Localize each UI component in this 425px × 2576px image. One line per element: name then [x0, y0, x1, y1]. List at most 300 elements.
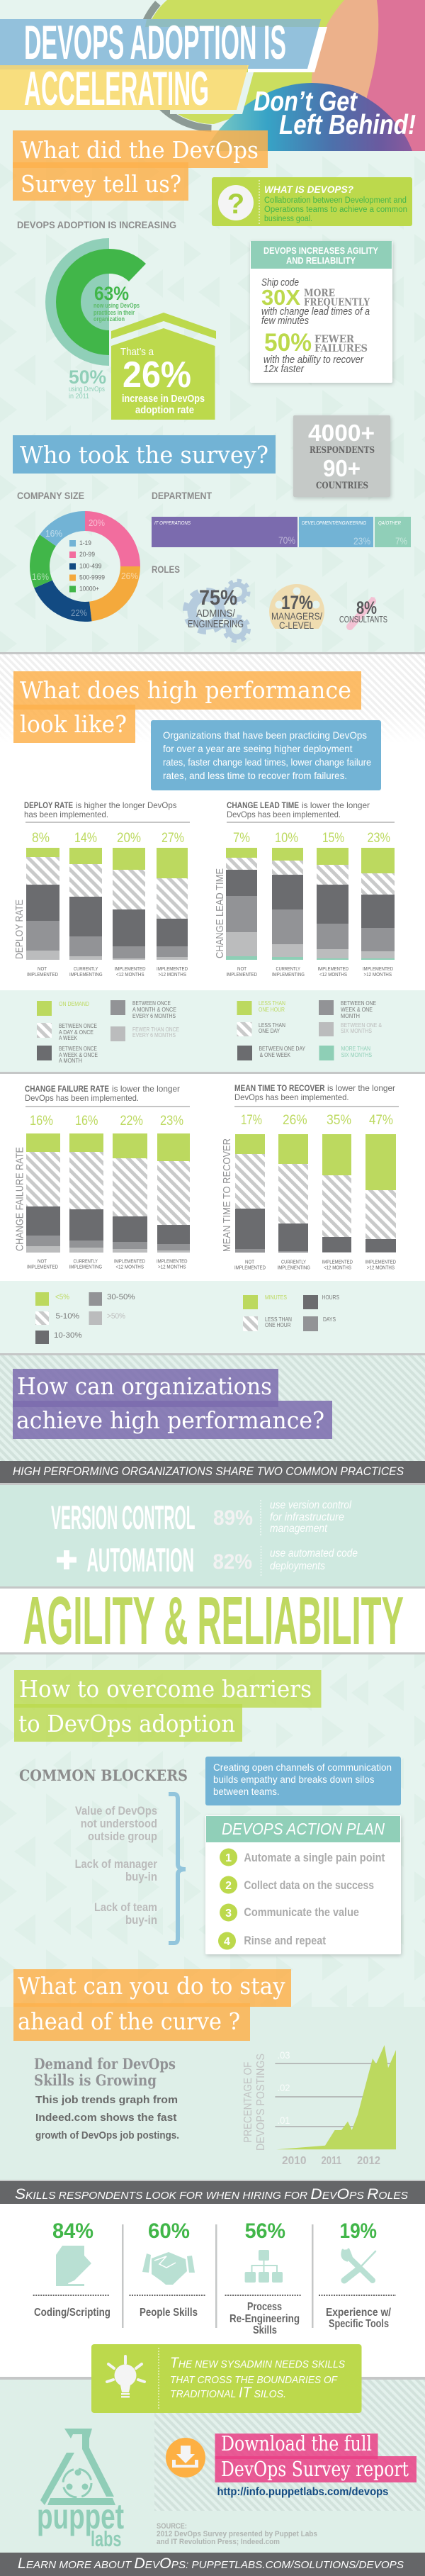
panel: devops action plan: DEVOPS ACTION PLAN	[222, 1820, 385, 1838]
subheading: roles: ROLES	[152, 564, 180, 575]
chart: change failure rate: >12 MONTHS	[158, 1263, 186, 1270]
panel: respondents and countries	[293, 415, 390, 497]
legend band: deploy rate and lead time: SIX MONTHS	[341, 1028, 372, 1034]
callout: open channels of communication: between teams.	[213, 1786, 280, 1797]
callout: what is devops: business goal.	[264, 215, 312, 223]
heading: what can you do to stay ahead	[13, 1969, 291, 2041]
chart: change failure rate: CHANGE FAILURE RATE	[14, 1147, 26, 1251]
heading: what did the survey tell us: What did the DevOps	[21, 136, 259, 164]
bar: department split: 23%	[353, 535, 370, 547]
area chart: devops job postings	[242, 2045, 396, 2167]
chart: mean time to recover: MEAN TIME TO RECOVER	[221, 1138, 233, 1252]
panel: agility and reliability: few minutes	[261, 315, 309, 327]
legend band: failure rate and recovery: ONE HOUR	[265, 1322, 291, 1328]
chart: deploy rate: 14%	[74, 831, 97, 846]
skill: coding and scripting: Coding/Scripting	[34, 2307, 110, 2319]
chart: deploy rate: is higher the longer DevOps	[76, 800, 177, 810]
subheading: company size: COMPANY SIZE	[17, 490, 84, 501]
panel: version control and automation: AUTOMATION	[86, 1541, 194, 1579]
panel: devops action plan: Automate a single pain point	[244, 1851, 385, 1864]
house callout: 26% increase: That’s a	[120, 346, 154, 358]
legend band: deploy rate and lead time: BETWEEN ONE	[341, 1000, 376, 1007]
legend band: failure rate and recovery: DAYS	[323, 1316, 336, 1323]
title banner	[0, 16, 327, 116]
legend band: deploy rate and lead time: LESS THAN	[259, 1000, 285, 1007]
chart: mean time to recover: IMPLEMENTED	[366, 1259, 396, 1265]
callout: the new sysadmin: TRADITIONAL IT SILOS.	[170, 2385, 286, 2401]
chart: mean time to recover: 35%	[327, 1113, 351, 1128]
bar: department split: 70%	[278, 534, 295, 546]
donut chart: adoption: 63%	[94, 283, 129, 304]
callout: the new sysadmin: THE NEW SYSADMIN NEEDS SKILLS	[170, 2355, 345, 2371]
panel: respondents and countries: RESPONDENTS	[310, 445, 375, 456]
legend band: deploy rate and lead time: EVERY 6 MONTHS	[132, 1013, 176, 1019]
panel: common blockers: COMMON BLOCKERS	[19, 1766, 188, 1784]
skill: process re-engineering: Re-Engineering	[230, 2313, 300, 2325]
panel: agility and reliability: 50%	[264, 329, 312, 357]
chart: change lead time: 15%	[322, 831, 344, 846]
donut chart: adoption: 50%	[69, 366, 106, 388]
donut chart: company size: 16%	[45, 528, 62, 539]
panel: devops action plan: Collect data on the success	[244, 1878, 374, 1892]
heading: what can you do to stay ahead: What can you do to stay	[18, 1972, 285, 2000]
chart: change failure rate: 22%	[120, 1114, 143, 1129]
legend band: deploy rate and lead time: WEEK & ONE	[341, 1007, 373, 1013]
legend band: deploy rate and lead time: ONE DAY	[259, 1028, 280, 1034]
panel: agility and reliability: with the ability to recover	[264, 354, 364, 366]
chart: change lead time: IMPLEMENTING	[272, 971, 305, 978]
legend band: deploy rate and lead time: BETWEEN ONE DAY	[259, 1046, 306, 1052]
panel: agility and reliability: with change lead times of a	[261, 306, 370, 318]
text block: demand for devops skills: Indeed.com shows the fast	[35, 2112, 177, 2124]
panel: agility and reliability: Ship code	[261, 276, 299, 289]
callout: organizations practicing devops	[151, 720, 381, 790]
chart: mean time to recover: IMPLEMENTED	[322, 1259, 353, 1265]
panel: agility and reliability	[250, 241, 392, 383]
panel: version control and automation: use version control	[270, 1499, 351, 1511]
logo: puppet labs: puppet	[37, 2497, 124, 2536]
background: striped section	[0, 1355, 425, 1461]
panel: devops action plan	[205, 1815, 401, 1954]
area chart: devops job postings: PRECENTAGE OF	[242, 2062, 254, 2143]
area chart: devops job postings: 2010	[282, 2155, 307, 2167]
text block: demand for devops skills: growth of DevOps job postings.	[35, 2129, 179, 2141]
chart: change lead time	[214, 800, 395, 978]
chart: change failure rate: IMPLEMENTING	[69, 1263, 102, 1270]
legend band: deploy rate and lead time: ONE HOUR	[259, 1007, 285, 1013]
legend band: deploy rate and lead time: BETWEEN ONCE	[59, 1023, 97, 1029]
icon: question mark: ?	[227, 189, 244, 220]
legend band: deploy rate and lead time: LESS THAN	[259, 1022, 285, 1029]
tagline: Don’t Get	[254, 86, 358, 117]
chart: mean time to recover: >12 MONTHS	[367, 1264, 395, 1270]
icon: org chart	[245, 2250, 283, 2283]
legend band: deploy rate and lead time: A MONTH & ONCE	[132, 1007, 176, 1013]
role: consultants	[339, 597, 387, 627]
chart: change lead time: DevOps has been implemented.	[227, 810, 341, 819]
panel: devops action plan: 4	[224, 1936, 230, 1948]
callout: open channels of communication	[205, 1757, 401, 1805]
chart: change lead time: <12 MONTHS	[319, 971, 347, 978]
panel: agility and reliability: 12x faster	[264, 363, 305, 375]
chart: change failure rate: is lower the longer	[112, 1084, 180, 1094]
chart: change lead time: IMPLEMENTED	[363, 965, 393, 972]
panel: respondents and countries: 90+	[323, 455, 361, 481]
area chart: devops job postings: 2012	[357, 2155, 380, 2167]
skill: experience with tools	[319, 2219, 396, 2330]
footer banner: learn more: LEARN MORE ABOUT DEVOPS: PUPPETLABS.COM/SOLUTIONS/DEVOPS	[18, 2555, 404, 2572]
donut chart: company size: 22%	[71, 607, 87, 618]
icon: document and pen	[56, 2246, 91, 2286]
house callout: 26% increase: increase in DevOps	[122, 393, 205, 405]
panel: devops action plan: Communicate the value	[244, 1905, 359, 1919]
chart: deploy rate: >12 MONTHS	[159, 971, 186, 978]
callout: organizations practicing devops: rates, faster change lead times, lower change failure	[163, 756, 371, 768]
role: admins and engineering	[186, 581, 249, 641]
callout: the new sysadmin	[91, 2344, 361, 2413]
panel: version control and automation: management	[270, 1523, 327, 1535]
legend band: failure rate and recovery: 5-10%	[55, 1312, 79, 1321]
chart: change failure rate: IMPLEMENTED	[114, 1258, 145, 1265]
panel: common blockers: Value of DevOps	[75, 1804, 157, 1818]
donut chart: adoption: now using DevOps	[94, 302, 140, 309]
heading: how to overcome barriers	[14, 1670, 322, 1742]
panel: agility and reliability: 30X	[261, 285, 300, 310]
panel: version control and automation: for infrastructure	[270, 1511, 344, 1523]
house callout: 26% increase: 26%	[123, 354, 191, 396]
icon: crossed tools	[342, 2249, 375, 2280]
donut chart: company size: 20%	[89, 517, 105, 528]
panel: agility and reliability: FAILURES	[314, 343, 368, 354]
skill: process re-engineering: Process	[247, 2301, 282, 2313]
chart: change failure rate: NOT	[38, 1258, 47, 1265]
legend band: deploy rate and lead time: BETWEEN ONCE	[132, 1000, 171, 1007]
chart: change failure rate: IMPLEMENTED	[157, 1258, 188, 1265]
chart: change lead time: CHANGE LEAD TIME	[214, 868, 226, 958]
background: white performance section	[0, 654, 425, 990]
chart: change lead time: IMPLEMENTED	[317, 965, 348, 972]
chart: change failure rate: 16%	[75, 1114, 98, 1129]
panel: version control and automation: use automated code	[270, 1547, 358, 1559]
source note: SOURCE:	[157, 2522, 187, 2531]
house callout: 26% increase	[111, 313, 216, 420]
skill: people skills: 60%	[148, 2219, 190, 2243]
panel: common blockers: buy-in	[125, 1870, 157, 1883]
chart: change lead time: 10%	[275, 831, 298, 846]
role: managers and c-level: MANAGERS/	[271, 610, 322, 622]
role: managers and c-level: C-LEVEL	[279, 620, 314, 631]
bar: department split: DEVELOPMENT/ENGINEERING	[302, 520, 366, 526]
callout: organizations practicing devops: rates, and less time to recover from failures.	[163, 770, 347, 781]
panel: devops action plan: 1	[225, 1852, 232, 1864]
chart: change lead time: >12 MONTHS	[364, 971, 392, 978]
area chart: devops job postings: DEVOPS POSTINGS	[255, 2054, 267, 2151]
call to action: download the report: http://info.puppetlabs.com/devops	[217, 2486, 388, 2498]
legend: company size	[69, 539, 105, 593]
chart: mean time to recover: 17%	[241, 1113, 262, 1128]
banner: skills respondents look for: SKILLS RESPONDENTS LOOK FOR WHEN HIRING FOR DEVOPS ROLES	[15, 2186, 408, 2202]
text block: demand for devops skills: Demand for DevOps	[34, 2055, 176, 2073]
legend: company size: 100-499	[79, 563, 102, 570]
logo: puppet labs: labs	[91, 2526, 122, 2551]
chart: change lead time: IMPLEMENTED	[227, 971, 257, 978]
legend band: failure rate and recovery: 30-50%	[107, 1293, 135, 1301]
role: admins and engineering: ENGINEERING	[188, 618, 244, 630]
legend band: deploy rate and lead time: MORE THAN	[341, 1046, 370, 1052]
chart: mean time to recover: is lower the longer	[327, 1083, 395, 1093]
panel: devops action plan: Rinse and repeat	[244, 1934, 326, 1947]
legend band: failure rate and recovery: LESS THAN	[265, 1316, 292, 1323]
call to action: download the report: Download the full	[221, 2431, 372, 2455]
legend: company size: 500-9999	[79, 574, 105, 581]
donut chart: adoption: using DevOps	[69, 386, 105, 393]
chart: mean time to recover: CURRENTLY	[281, 1259, 306, 1265]
callout: what is devops	[212, 177, 412, 226]
panel: devops action plan: 2	[225, 1880, 232, 1892]
banner: skills respondents look for	[0, 2180, 425, 2204]
panel: respondents and countries: 4000+	[308, 420, 375, 446]
skill: experience with tools: Specific Tools	[329, 2318, 389, 2330]
callout: open channels of communication: builds empathy and breaks down silos	[213, 1774, 375, 1785]
panel: version control and automation: deployments	[270, 1560, 325, 1572]
source note	[157, 2522, 317, 2546]
panel: skills	[0, 2204, 425, 2377]
legend band: failure rate and recovery: 10-30%	[54, 1331, 82, 1340]
chart: deploy rate: IMPLEMENTED	[115, 965, 146, 972]
chart: deploy rate: DEPLOY RATE	[24, 800, 73, 810]
chart: deploy rate: 8%	[32, 831, 50, 846]
chart: change failure rate: CURRENTLY	[74, 1258, 98, 1265]
heading: what does high performance look like: look like?	[20, 710, 127, 738]
legend band: deploy rate and lead time: ON DEMAND	[59, 1001, 89, 1007]
legend band: deploy rate and lead time: MONTH	[341, 1013, 360, 1019]
chart: mean time to recover: MEAN TIME TO RECOVER	[234, 1083, 325, 1093]
role: consultants: CONSULTANTS	[339, 614, 387, 625]
chart: deploy rate: IMPLEMENTED	[157, 965, 188, 972]
panel: common blockers: buy-in	[125, 1913, 157, 1927]
callout: organizations practicing devops: Organizations that have been practicing DevOps	[163, 729, 367, 741]
chart: change lead time: NOT	[237, 965, 246, 972]
chart: mean time to recover: 47%	[369, 1113, 393, 1128]
bar: department split: 7%	[395, 535, 407, 547]
skill: coding and scripting: 84%	[52, 2219, 94, 2243]
chart: mean time to recover: NOT	[245, 1259, 254, 1265]
icon: question mark	[218, 185, 254, 220]
skill: process re-engineering: 56%	[245, 2219, 285, 2243]
chart: change failure rate: DevOps has been implemented.	[25, 1093, 139, 1103]
role: managers and c-level	[269, 584, 324, 631]
call to action: download the report	[215, 2431, 416, 2498]
chart: mean time to recover: 26%	[283, 1113, 307, 1128]
panel: version control and automation: VERSION CONTROL	[51, 1499, 196, 1536]
role: admins and engineering: ADMINS/	[196, 607, 236, 620]
heading: what did the survey tell us	[13, 130, 268, 201]
panel: common blockers: outside group	[88, 1830, 157, 1843]
callout: open channels of communication: Creating open channels of communication	[213, 1762, 392, 1773]
text block: demand for devops skills	[34, 2055, 179, 2141]
chart: deploy rate: NOT	[38, 965, 47, 972]
chart: change failure rate: <12 MONTHS	[116, 1263, 144, 1270]
bar: department split: QA/OTHER	[378, 520, 401, 526]
donut chart: adoption: organization	[94, 315, 125, 323]
panel: devops action plan: 3	[225, 1908, 232, 1920]
chart: mean time to recover: IMPLEMENTING	[278, 1264, 310, 1270]
heading: what can you do to stay ahead: ahead of the curve ?	[18, 2007, 240, 2035]
legend: company size: 1-19	[79, 539, 91, 547]
callout: the new sysadmin: THAT CROSS THE BOUNDARIES OF	[170, 2374, 338, 2386]
legend band: deploy rate and lead time: BETWEEN ONCE	[59, 1046, 97, 1052]
legend band: deploy rate and lead time: FEWER THAN ONCE	[132, 1026, 179, 1033]
chart: change lead time: 7%	[233, 831, 250, 846]
chart: mean time to recover: DevOps has been implemented.	[234, 1092, 348, 1102]
icon: light bulb	[107, 2356, 144, 2397]
hero artwork: coloured circles	[139, 0, 425, 151]
donut chart: adoption	[45, 238, 146, 401]
chart: deploy rate: 27%	[162, 831, 184, 846]
heading: what did the survey tell us: Survey tell us?	[21, 170, 181, 198]
source note: 2012 DevOps Survey presented by Puppet Labs	[157, 2530, 317, 2538]
legend band: failure rate and recovery: >50%	[107, 1312, 125, 1321]
background: footer mint section	[0, 2377, 425, 2553]
donut chart: adoption: in 2011	[69, 393, 89, 401]
legend: company size: 10000+	[79, 586, 99, 593]
chart: change failure rate: IMPLEMENTED	[27, 1263, 58, 1270]
chart: change lead time: 23%	[367, 831, 390, 846]
chart: change failure rate: 23%	[160, 1114, 183, 1129]
heading: how can organizations achieve high performance: How can organizations	[17, 1372, 272, 1400]
legend band: deploy rate and lead time: BETWEEN ONE &	[341, 1022, 382, 1029]
heading: what does high performance look like	[13, 671, 361, 743]
heading: how to overcome barriers: How to overcome barriers	[19, 1675, 312, 1703]
callout: what is devops: Collaboration between Development and	[264, 196, 407, 205]
callout: organizations practicing devops: for over a year are seeing higher deployment	[163, 743, 353, 754]
panel: common blockers: Lack of manager	[75, 1857, 157, 1871]
callout: what is devops: Operations teams to achieve a common	[264, 206, 407, 214]
role: admins and engineering: 75%	[199, 586, 237, 610]
panel: version control and automation	[0, 1485, 425, 1589]
background: white lower chart section	[0, 1074, 425, 1281]
bar: department split	[152, 517, 411, 547]
legend band: failure rate and recovery: <5%	[55, 1293, 69, 1301]
panel: agility and reliability: FREQUENTLY	[304, 297, 370, 308]
icon: plus	[57, 1550, 76, 1569]
panel: common blockers: not understood	[81, 1817, 157, 1830]
skill: people skills: People Skills	[140, 2307, 198, 2319]
panel: agility and reliability: MORE	[304, 288, 335, 299]
panel: agility and reliability: DEVOPS INCREASES AGILITY	[264, 245, 378, 256]
chart: mean time to recover: <12 MONTHS	[324, 1264, 351, 1270]
panel: common blockers: Lack of team	[94, 1900, 157, 1914]
footer banner: learn more	[0, 2553, 425, 2576]
legend band: deploy rate and lead time: A MONTH	[59, 1058, 82, 1064]
chart: deploy rate: <12 MONTHS	[116, 971, 144, 978]
panel: version control and automation: 82%	[212, 1550, 252, 1574]
bar: department split: IT OPPERATIONS	[154, 520, 191, 526]
heading: how to overcome barriers: to DevOps adoption	[18, 1710, 235, 1737]
chart: change lead time: is lower the longer	[302, 800, 370, 810]
chart: deploy rate: CURRENTLY	[74, 965, 98, 972]
source note: and IT Revolution Press; Indeed.com	[157, 2538, 280, 2546]
skill: people skills	[129, 2219, 206, 2319]
donut chart: adoption: practices in their	[94, 309, 135, 316]
skill: process re-engineering: Skills	[253, 2324, 277, 2336]
subheading: department: DEPARTMENT	[152, 490, 212, 501]
role: consultants: 8%	[356, 598, 377, 618]
legend band: deploy rate and lead time	[0, 990, 425, 1074]
panel: agility and reliability: AND RELIABILITY	[286, 255, 356, 266]
panel: common blockers	[19, 1766, 188, 1943]
legend band: deploy rate and lead time: EVERY 6 MONTHS	[132, 1032, 176, 1038]
donut chart: company size	[30, 511, 140, 622]
donut chart: company size: 16%	[32, 571, 49, 582]
skill: experience with tools: 19%	[340, 2219, 377, 2243]
skill: process re-engineering	[225, 2219, 302, 2336]
text block: demand for devops skills: Skills is Growing	[34, 2071, 157, 2089]
donut chart: company size: 26%	[121, 571, 138, 581]
house callout: 26% increase: adoption rate	[135, 404, 194, 416]
chart: mean time to recover	[221, 1083, 399, 1270]
chart: deploy rate: IMPLEMENTING	[69, 971, 103, 978]
chart: change failure rate: 16%	[30, 1114, 53, 1129]
area chart: devops job postings: .01	[278, 2115, 290, 2126]
panel: respondents and countries: COUNTRIES	[316, 481, 368, 491]
chart: deploy rate	[13, 800, 190, 978]
legend band: deploy rate and lead time: A DAY & ONCE	[59, 1029, 94, 1036]
chart: deploy rate: has been implemented.	[24, 810, 108, 819]
banner: two common practices	[0, 1461, 425, 1485]
logo: puppet labs	[37, 2429, 124, 2551]
skill: coding and scripting	[33, 2219, 110, 2319]
legend: company size: 20-99	[79, 551, 95, 558]
chart: deploy rate: DEPLOY RATE	[13, 900, 26, 959]
legend band: deploy rate and lead time: A WEEK & ONCE	[59, 1052, 98, 1058]
legend band: failure rate and recovery: HOURS	[322, 1294, 339, 1301]
background: lower mint section	[0, 1654, 425, 2180]
heading: who took the survey: Who took the survey?	[20, 441, 268, 469]
callout: what is devops: WHAT IS DEVOPS?	[264, 184, 353, 195]
icon: download	[166, 2438, 205, 2477]
title banner: ACCELERATING	[24, 62, 209, 116]
area chart: devops job postings: 2011	[322, 2155, 341, 2167]
heading: what does high performance look like: What does high performance	[20, 676, 351, 704]
subheading: adoption increasing: DEVOPS ADOPTION IS INCREASING	[17, 220, 176, 230]
chart: change lead time: CHANGE LEAD TIME	[227, 800, 299, 810]
icon: handshake	[142, 2252, 195, 2285]
legend band: deploy rate and lead time: SIX MONTHS	[341, 1052, 372, 1058]
legend band: deploy rate and lead time: A WEEK	[59, 1035, 78, 1041]
legend band: failure rate and recovery	[0, 1281, 425, 1355]
area chart: devops job postings: .02	[278, 2082, 290, 2093]
chart: deploy rate: IMPLEMENTED	[27, 971, 58, 978]
chart: change failure rate: CHANGE FAILURE RATE	[25, 1084, 109, 1094]
tagline	[254, 86, 416, 140]
legend band: failure rate and recovery: MINUTES	[265, 1294, 287, 1301]
skill: experience with tools: Experience w/	[326, 2307, 391, 2319]
panel: agility and reliability: FEWER	[314, 334, 354, 345]
panel: version control and automation: 89%	[213, 1506, 253, 1530]
area chart: devops job postings: .03	[278, 2049, 290, 2061]
chart: deploy rate: 20%	[117, 831, 141, 846]
heading: how can organizations achieve high performance	[13, 1369, 332, 1439]
legend band: deploy rate and lead time: & ONE WEEK	[260, 1052, 291, 1058]
text block: demand for devops skills: This job trends graph from	[35, 2094, 178, 2106]
bracket	[169, 1794, 186, 1943]
background: top mint section	[0, 0, 425, 654]
chart: change failure rate	[14, 1084, 190, 1270]
heading: how can organizations achieve high performance: achieve high performance?	[16, 1406, 324, 1434]
chart: mean time to recover: IMPLEMENTED	[234, 1264, 266, 1270]
role: managers and c-level: 17%	[281, 592, 313, 613]
